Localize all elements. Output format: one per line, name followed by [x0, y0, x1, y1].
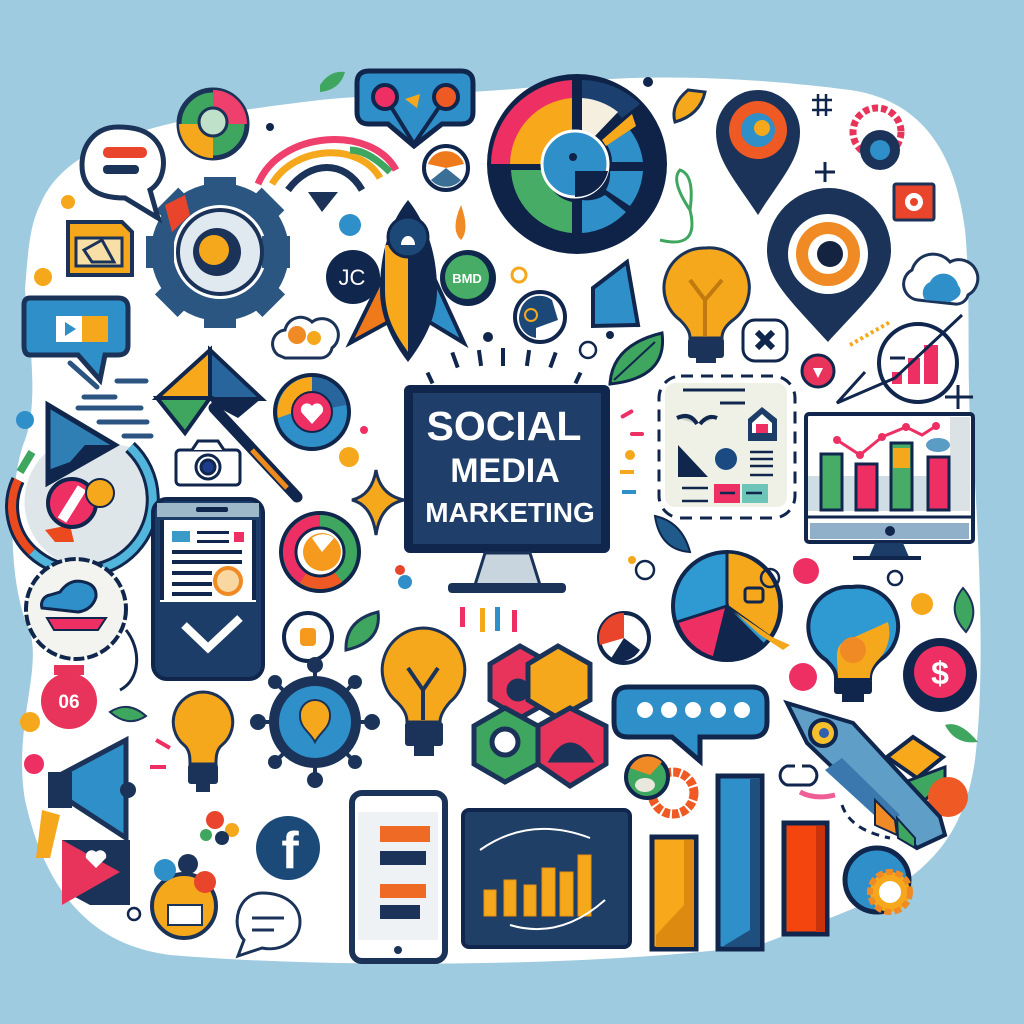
icon: rocket center	[350, 200, 464, 362]
icon: cloud badge	[26, 559, 137, 690]
icon: pink pin circle	[802, 355, 834, 387]
icon: large map pin right	[767, 188, 891, 342]
icon: Facebook badge	[256, 816, 320, 880]
icon: motion lines	[70, 363, 151, 436]
icon: small location circle	[424, 146, 468, 190]
icon: map pin top right	[716, 90, 800, 215]
icon: camera	[176, 441, 240, 485]
icon: alarm badge 06	[41, 665, 97, 729]
icon: small leaf left	[110, 707, 146, 721]
icon: rocket lower right	[787, 703, 968, 848]
title	[425, 403, 595, 528]
icon: chain link	[780, 766, 890, 838]
icon: lightbulb top right	[664, 248, 749, 363]
title: SOCIAL	[427, 403, 581, 449]
icon: hexagon people	[474, 646, 606, 786]
icon: monitor with title	[404, 385, 610, 593]
icon: growth chart circle	[837, 315, 962, 403]
icon: blue leaf	[655, 516, 690, 552]
icon: JC badge: JC	[339, 265, 366, 290]
icon: web page dashed panel	[659, 376, 795, 518]
icon: leaf center	[346, 612, 378, 650]
icon: kite and hammer	[157, 350, 297, 497]
icon: pink donut near monitor	[599, 613, 649, 663]
icon: BMD badge: BMD	[452, 271, 482, 286]
icon: speech bubble top left	[82, 127, 163, 218]
title: MEDIA	[450, 452, 560, 490]
icon: phone bottom	[352, 793, 445, 961]
icon: chat bubble bottom	[237, 893, 300, 956]
icon: play and circular ring	[12, 405, 158, 571]
icon: megaphone	[36, 740, 136, 858]
icon: cloud flower	[273, 317, 338, 358]
icon: ring chart center left	[281, 513, 359, 591]
icon: lightbulb lower left	[173, 692, 233, 792]
icon: desktop bar chart	[806, 414, 973, 560]
icon: presentation chart	[463, 810, 630, 947]
icon: floppy note	[68, 222, 132, 275]
icon: JC badge	[326, 250, 380, 304]
icon: gears top right	[853, 108, 901, 170]
icon: Facebook badge: f	[281, 822, 299, 880]
icon: chat bubble dots	[614, 687, 767, 761]
icon: dollar badge	[903, 638, 977, 712]
icon: camera square	[894, 184, 934, 220]
icon: star sparkle	[352, 470, 404, 535]
icon: large donut chart top	[487, 74, 667, 254]
icon: dark ring badge	[515, 292, 565, 342]
icon: gear top left	[146, 177, 290, 328]
icon: phone with check	[153, 499, 263, 679]
icon: cloud right	[904, 254, 978, 304]
icon: leaf center right	[610, 333, 663, 384]
decorative confetti	[16, 72, 978, 920]
icon: pie chart right	[673, 552, 790, 660]
icon: pointer tag	[593, 262, 638, 326]
icon: ring chart top left	[179, 90, 247, 158]
icon: heart bubble top	[357, 71, 473, 146]
icon: gear and swirl	[626, 756, 694, 814]
icon: network virus	[252, 659, 378, 786]
icon: dollar badge: $	[931, 655, 949, 691]
icon: close button	[743, 320, 787, 361]
icon: video bubble	[24, 298, 128, 380]
title: MARKETING	[425, 497, 595, 528]
icon: cluster of social bubbles	[152, 854, 216, 938]
icon: BMD badge	[440, 250, 496, 306]
bar chart bottom	[652, 776, 827, 949]
icon: heart ring	[275, 375, 349, 449]
icon: blue circle with gear	[845, 848, 910, 912]
icon: rainbow wifi	[258, 140, 396, 212]
icon: alarm badge 06: 06	[58, 692, 80, 713]
icon: small orange badge	[284, 613, 332, 661]
icon: heart play tile	[62, 840, 130, 905]
icon: lightbulb center	[382, 628, 465, 756]
icon: flower splash	[200, 811, 239, 845]
icon: leaf right	[955, 588, 973, 632]
icon: lightbulb blue and yellow	[808, 587, 898, 702]
